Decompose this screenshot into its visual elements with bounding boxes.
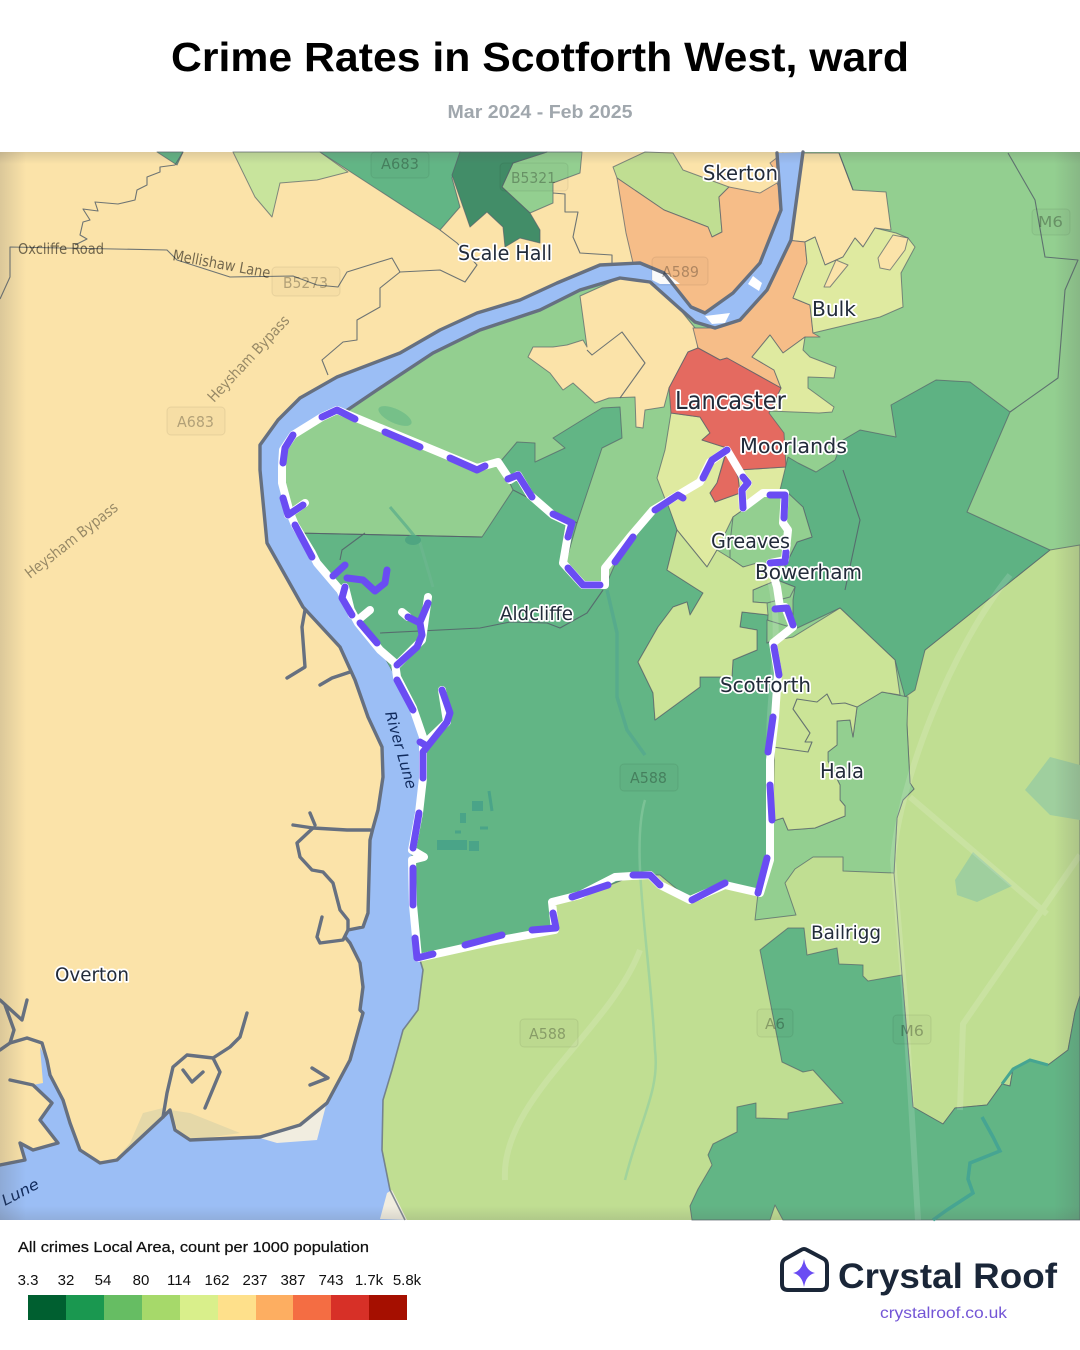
- place labels: Greaves: [711, 529, 790, 553]
- subtitle: date range: Mar 2024 - Feb 2025: [448, 102, 632, 122]
- map base: sand area: [0, 152, 1080, 1220]
- road labels: Heysham Bypass: [21, 498, 122, 582]
- faint ward boundaries on the sand and green: [0, 152, 1078, 752]
- ward boundary: Scotforth West: [282, 410, 793, 958]
- yellow ward: Bulk: [793, 228, 915, 333]
- legend scale values: 5.8k: [393, 1272, 422, 1289]
- legend scale values: 80: [133, 1272, 149, 1289]
- road labels: A589: [662, 263, 699, 281]
- darker ward west of centre: [500, 407, 622, 523]
- areas north of the river: [157, 152, 785, 313]
- place labels: Overton: [55, 964, 129, 986]
- areas south and east of the river: [280, 152, 1080, 1220]
- brand name: Crystal Roof: [838, 1257, 1057, 1296]
- road labels: M6: [1038, 213, 1063, 231]
- legend scale values: [18, 1272, 422, 1289]
- boundary white casing: [282, 410, 793, 958]
- water labels: River Lune: [381, 709, 421, 791]
- mudflats: [117, 1090, 407, 1220]
- place labels: Aldcliffe: [500, 603, 573, 625]
- legend scale values: 743: [318, 1272, 344, 1289]
- yellow wedge around city centre: [657, 413, 787, 567]
- dark wards: Bowerham east: [777, 380, 1050, 697]
- Hala yellow-green ward: [773, 608, 900, 830]
- place labels: Lancaster: [675, 386, 787, 415]
- place labels: Hala: [820, 759, 864, 783]
- legend scale values: 32: [58, 1272, 74, 1289]
- place labels: Skerton: [703, 161, 778, 185]
- red ward: city centre: [669, 348, 786, 470]
- white bridges over the river: [652, 269, 762, 324]
- boundary purple dashes: [283, 410, 793, 958]
- road labels: A683: [381, 155, 419, 173]
- legend scale values: 3.3: [18, 1272, 38, 1289]
- place labels: [55, 161, 881, 986]
- dark ward: Bailrigg south: [690, 928, 1080, 1220]
- road labels: A683: [177, 413, 214, 431]
- legend title: All crimes Local Area, count per 1000 population: [18, 1239, 369, 1256]
- place labels: Scale Hall: [458, 241, 552, 265]
- road labels: M6: [900, 1022, 924, 1040]
- legend scale values: 162: [204, 1272, 230, 1289]
- choropleth map: [0, 152, 1080, 1220]
- place labels: Bailrigg: [811, 922, 881, 944]
- legend: [18, 1239, 422, 1320]
- faint motorway bands: [505, 575, 1080, 1220]
- place labels: Moorlands: [740, 434, 847, 458]
- river and estuary water: [0, 152, 803, 1220]
- light green east: [894, 545, 1080, 1124]
- Hala medium ward: [755, 692, 914, 920]
- legend scale values: 387: [280, 1272, 306, 1289]
- road labels: [18, 152, 1070, 1047]
- road labels: Heysham Bypass: [204, 311, 293, 406]
- legend scale values: 114: [167, 1272, 191, 1289]
- legend scale values: 237: [242, 1272, 268, 1289]
- place labels: Bulk: [812, 297, 856, 321]
- road labels: B5321: [511, 169, 556, 187]
- sand wards south of the river: [296, 153, 1080, 1220]
- coastline outlines: [0, 152, 803, 1165]
- title: Crime Rates in Scotforth West, ward: [171, 34, 909, 80]
- road labels: Oxcliffe Road: [18, 240, 104, 258]
- road labels: A588: [529, 1025, 566, 1043]
- Greaves ward: [730, 492, 812, 567]
- place labels: Bowerham: [755, 560, 862, 584]
- road labels: A588: [630, 769, 667, 787]
- vignette at map edges: [0, 152, 1080, 1220]
- road labels: B5273: [283, 274, 328, 292]
- road labels: A6: [765, 1015, 785, 1033]
- light green south: [382, 857, 1080, 1220]
- brand logo: [782, 1249, 1057, 1322]
- east estuary bank: [382, 960, 423, 1220]
- brand url: crystalroof.co.uk: [880, 1305, 1008, 1322]
- dark ward: Aldcliffe and ward body: [296, 490, 775, 960]
- water labels: [0, 709, 421, 1210]
- Scotforth yellow-green ward: [638, 530, 777, 720]
- place labels: Scotforth: [720, 673, 811, 697]
- streams and ponds: [376, 402, 1080, 1220]
- legend colour scale: [28, 1295, 407, 1320]
- legend scale values: 1.7k: [355, 1272, 384, 1289]
- icon: house with star: [782, 1249, 827, 1290]
- legend scale values: 54: [95, 1272, 111, 1289]
- orange ward: Lancaster north: [693, 240, 820, 388]
- road labels: Mellishaw Lane: [171, 246, 272, 282]
